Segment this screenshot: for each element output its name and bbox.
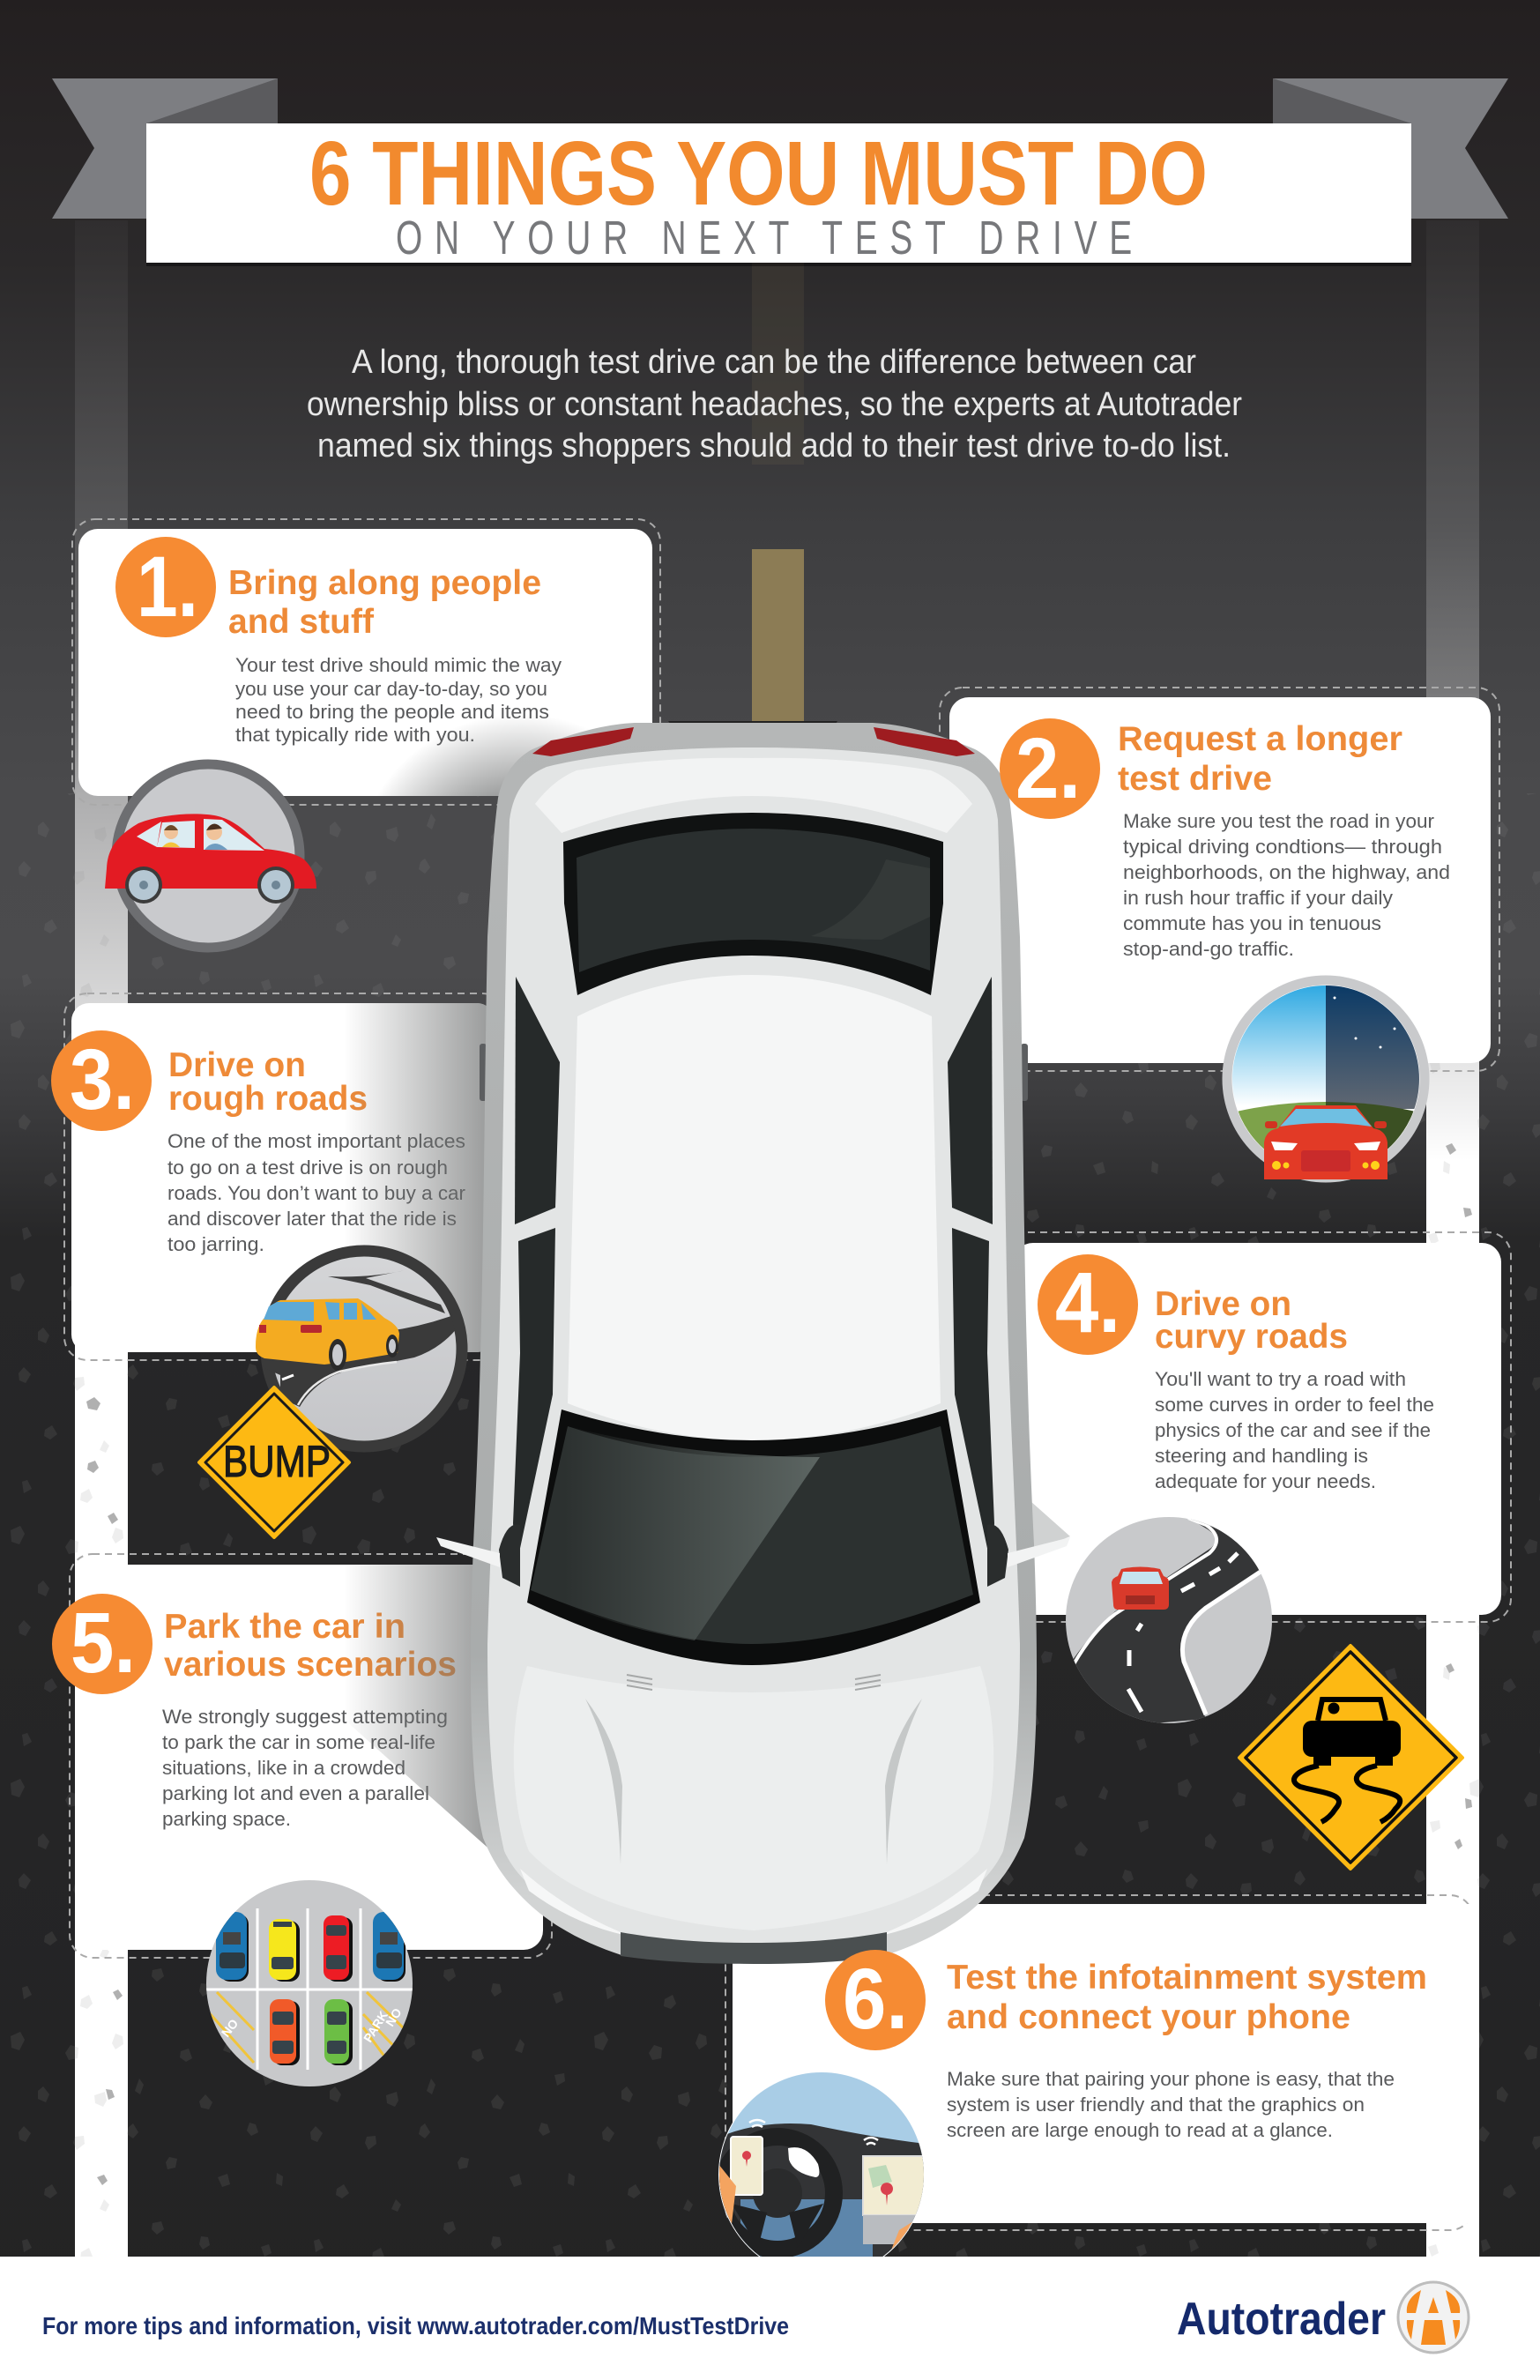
- panel: step 4: [1014, 1243, 1501, 1615]
- icon: parking lot: [206, 1880, 414, 2101]
- text: step 5: parking lot and even a parallel: [162, 1782, 429, 1804]
- heading: step 4: Drive on: [1155, 1285, 1291, 1323]
- text: step 1: need to bring the people and items: [235, 701, 549, 723]
- text: step 2: typical driving condtions— through: [1123, 836, 1442, 858]
- heading: step 5: Park the car in: [164, 1608, 405, 1646]
- heading: step 3: Drive on: [168, 1046, 306, 1084]
- number badge 2: [1000, 718, 1100, 819]
- panel: step 2: [949, 697, 1491, 1063]
- number badge 4: [1038, 1254, 1138, 1355]
- car tail lights: [532, 727, 975, 756]
- icon: yellow car on rough road: [256, 1251, 462, 1447]
- text: step 2: in rush hour traffic if your daily: [1123, 887, 1393, 909]
- heading: step 2: Request a longer: [1118, 720, 1402, 758]
- icon: parking lot: PARK: [361, 2008, 391, 2045]
- heading: step 1: [228, 564, 541, 641]
- text: step 4: adequate for your needs.: [1155, 1470, 1376, 1492]
- text: step 5: to park the car in some real-life: [162, 1731, 435, 1753]
- title banner: [52, 78, 1508, 266]
- icon: day and night sky with red car: [1227, 980, 1425, 1181]
- parked cars: [216, 1912, 405, 2065]
- number badge 6: 6.: [843, 1951, 908, 2047]
- car hood vents: [627, 1675, 881, 1690]
- title banner: ON YOUR NEXT TEST DRIVE: [396, 211, 1132, 264]
- car windshield: [527, 1409, 980, 1665]
- footer: [0, 2257, 1540, 2380]
- intro paragraph: named six things shoppers should add to their test drive to-do list.: [317, 428, 1231, 465]
- text: step 3: [167, 1130, 465, 1255]
- heading: step 6: and connect your phone: [947, 1998, 1350, 2036]
- icon: BUMP road sign: BUMP: [223, 1437, 331, 1486]
- text: step 5: [162, 1706, 448, 1830]
- heading: step 5: [164, 1608, 457, 1684]
- text: step 5: situations, like in a crowded: [162, 1757, 405, 1779]
- heading: step 1: Bring along people: [228, 564, 541, 602]
- text: step 3: One of the most important places: [167, 1130, 465, 1152]
- icon: parking lot: NO: [219, 2016, 241, 2040]
- heading: step 4: [1155, 1285, 1348, 1356]
- car side windows: [513, 977, 994, 1569]
- number badge 6: [825, 1950, 926, 2050]
- text: step 2: neighborhoods, on the highway, and: [1123, 861, 1450, 883]
- heading: step 6: [947, 1959, 1427, 2036]
- heading: step 2: [1118, 720, 1402, 798]
- panel: step 3: [71, 1003, 495, 1352]
- heading: step 1: and stuff: [228, 603, 375, 641]
- text: step 3: roads. You don’t want to buy a car: [167, 1182, 465, 1204]
- text: step 4: physics of the car and see if the: [1155, 1419, 1431, 1441]
- car rear window: [563, 813, 943, 995]
- text: step 6: Make sure that pairing your phone is easy, that the: [947, 2068, 1395, 2090]
- intro paragraph: A long, thorough test drive can be the difference between car: [352, 344, 1196, 381]
- text: step 4: some curves in order to feel the: [1155, 1394, 1434, 1416]
- icon: car dashboard with phone and infotainment map: [718, 2072, 924, 2257]
- car hood highlight: [514, 1666, 993, 1930]
- panel: step 1: [78, 529, 652, 796]
- intro paragraph: [307, 344, 1242, 465]
- heading: step 3: rough roads: [168, 1080, 368, 1118]
- icon: curvy road with red car: [1058, 1516, 1272, 1728]
- car wing mirrors: [436, 1524, 1070, 1587]
- intro paragraph: ownership bliss or constant headaches, so the experts at Autotrader: [307, 386, 1242, 423]
- number badge 4: 4.: [1055, 1254, 1120, 1350]
- car body outline: [471, 723, 1037, 1963]
- text: step 1: that typically ride with you.: [235, 724, 475, 746]
- logo: Autotrader: Autotrader: [1177, 2294, 1386, 2345]
- car trunk highlight: [535, 758, 972, 833]
- text: step 3: too jarring.: [167, 1233, 264, 1255]
- text: step 2: Make sure you test the road in your: [1123, 810, 1434, 832]
- text: step 4: [1155, 1368, 1434, 1492]
- number badge 1: [115, 537, 216, 637]
- number badge 1: 1.: [137, 539, 198, 635]
- car side handles: [480, 1044, 1028, 1341]
- number badge 3: 3.: [70, 1031, 135, 1127]
- title banner: 6 THINGS YOU MUST DO: [309, 123, 1208, 224]
- text: step 5: We strongly suggest attempting: [162, 1706, 448, 1728]
- heading: step 6: Test the infotainment system: [947, 1959, 1427, 1997]
- text: step 3: to go on a test drive is on rough: [167, 1157, 448, 1179]
- number badge 5: 5.: [71, 1595, 136, 1691]
- car hood creases: [585, 1699, 922, 1864]
- icon: parking lot: NO: [383, 2005, 405, 2029]
- text: step 4: You'll want to try a road with: [1155, 1368, 1406, 1390]
- car mirror shadow: [1023, 1494, 1070, 1556]
- logo: Autotrader: [1177, 2282, 1469, 2353]
- heading: step 2: test drive: [1118, 760, 1272, 798]
- text: step 6: system is user friendly and that the graphics on: [947, 2094, 1365, 2116]
- text: step 2: [1123, 810, 1450, 960]
- number badge 2: 2.: [1016, 720, 1081, 816]
- text: step 1: Your test drive should mimic the way: [235, 654, 562, 676]
- panel: step 5: [75, 1565, 543, 1950]
- number badge 3: [51, 1030, 152, 1131]
- icon: BUMP road sign: [199, 1387, 349, 1537]
- car front corner highlights: [520, 1869, 987, 1939]
- icon: red car with family: [105, 764, 316, 948]
- car spoiler: [668, 721, 837, 730]
- illustration: top-down white car: [436, 721, 1070, 1964]
- icon: parking lot: PARKING: [217, 2049, 262, 2101]
- text: step 6: screen are large enough to read at a glance.: [947, 2119, 1333, 2141]
- number badge 5: [52, 1594, 153, 1694]
- text: step 1: [235, 654, 562, 746]
- text: step 1: you use your car day-to-day, so you: [235, 678, 547, 700]
- text: step 2: stop-and-go traffic.: [1123, 938, 1294, 960]
- car shadow on cards: [355, 721, 579, 1848]
- heading: step 5: various scenarios: [164, 1646, 457, 1684]
- panel: step 6: [733, 1904, 1479, 2223]
- car body top: [487, 747, 1020, 1943]
- heading: step 4: curvy roads: [1155, 1318, 1348, 1356]
- text: step 4: steering and handling is: [1155, 1445, 1368, 1467]
- icon: slippery road sign: [1239, 1646, 1462, 1869]
- dashed card outlines: [64, 519, 1511, 2230]
- text: step 5: parking space.: [162, 1808, 291, 1830]
- car front bumper: [621, 1932, 887, 1964]
- text: step 6: [947, 2068, 1395, 2141]
- text: step 2: commute has you in tenuous: [1123, 912, 1381, 934]
- car roof: [568, 975, 941, 1440]
- footer link text: For more tips and information, visit www.autotrader.com/MustTestDrive: [42, 2312, 789, 2339]
- heading: step 3: [168, 1046, 368, 1118]
- text: step 3: and discover later that the ride is: [167, 1208, 457, 1230]
